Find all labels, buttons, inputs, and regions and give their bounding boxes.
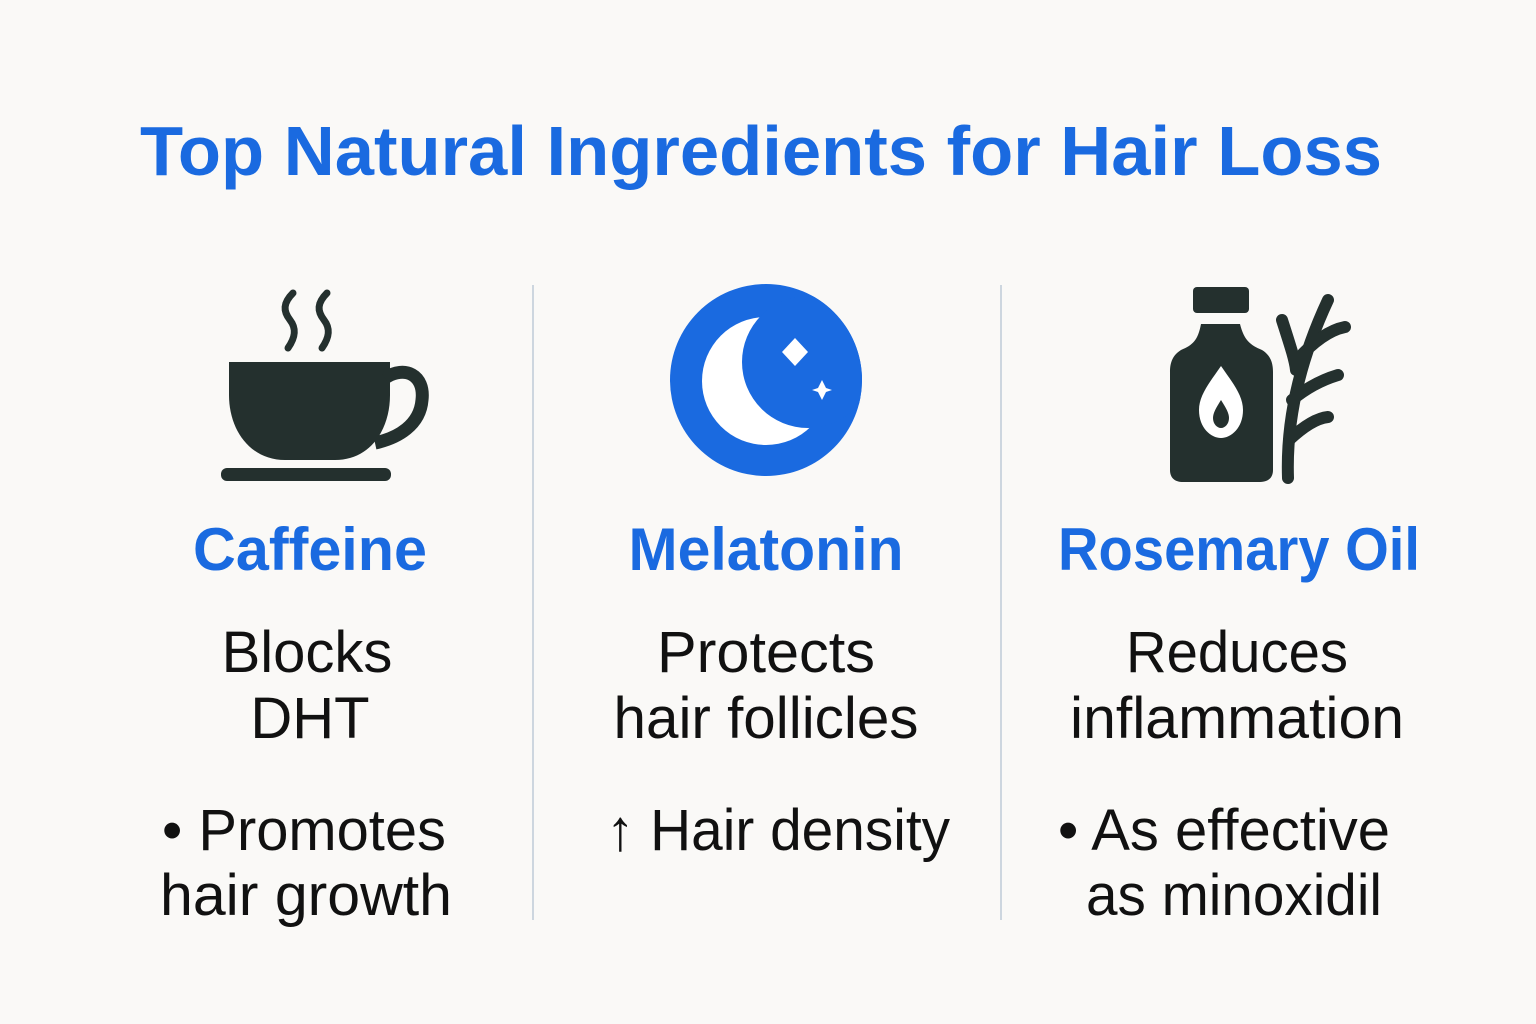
panel: rosemary oil: inflammation: [1070, 686, 1404, 751]
icon: oil bottle and rosemary: [1170, 287, 1345, 482]
text: hair density: ↑ Hair density: [606, 798, 950, 863]
text: Blocks DHT: Blocks: [222, 620, 392, 685]
panel: caffeine: DHT: [250, 686, 370, 751]
heading: Rosemary Oil: Rosemary Oil: [1058, 516, 1420, 583]
title: Top Natural Ingredients for Hair Loss: [140, 112, 1382, 190]
panel: melatonin: [606, 284, 950, 863]
heading: Melatonin: Melatonin: [628, 516, 904, 583]
text: protects hair follicles: Protects: [657, 620, 875, 685]
icon: moon circle: [670, 284, 874, 476]
panel: melatonin: hair follicles: [614, 686, 918, 751]
heading: Caffeine: Caffeine: [193, 516, 427, 583]
panel: caffeine: hair growth: [160, 863, 452, 928]
text: promotes hair growth: • Promotes: [162, 798, 446, 863]
panel: rosemary oil: [1058, 287, 1420, 928]
text: reduces inflammation: Reduces: [1126, 620, 1348, 685]
icon: coffee cup: [221, 293, 422, 481]
panel: caffeine: [160, 293, 452, 928]
text: as effective as minoxidil: • As effective: [1058, 798, 1390, 863]
panel: rosemary oil: as minoxidil: [1086, 863, 1382, 928]
